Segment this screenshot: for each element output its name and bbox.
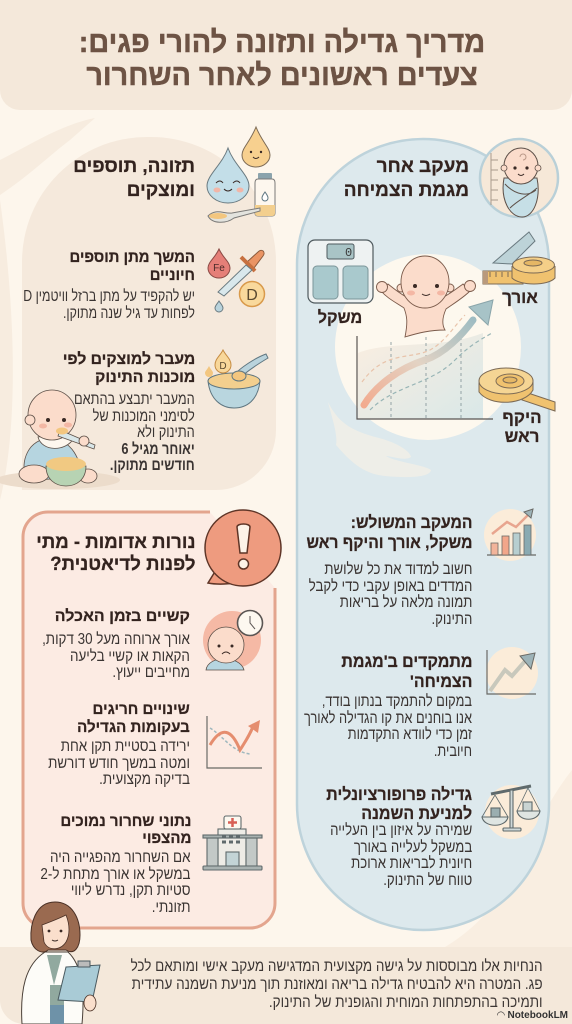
heading: low discharge data: [60, 813, 191, 847]
icon: head tape: [479, 368, 555, 411]
heading: nutrition: תזונה, תוספים: [73, 156, 195, 177]
text: growth curve: [304, 693, 472, 760]
icon: iron and vitamin D dropper: [208, 249, 264, 312]
text: triple tracking: תמונה מלאה על בריאות: [339, 594, 472, 611]
text: supplements: לפחות עד גיל שנה מתוקן.: [63, 305, 195, 322]
text: triple tracking: [308, 561, 472, 628]
icon: bar chart: [484, 509, 536, 561]
icon: measuring tape and ruler: [483, 232, 555, 284]
growth chart with baby: [335, 254, 521, 440]
heading: low discharge data: נתוני שחרור נמוכים: [60, 813, 191, 830]
text: low discharge data: במשקל או אורך מתחת ל-2: [41, 866, 191, 883]
text: proportional growth: חיונית לבריאות ארוכת: [351, 855, 472, 872]
text: low discharge data: סטיות תקן, נדרש ליווי: [71, 882, 191, 899]
icon: swaddled baby: [480, 139, 558, 217]
text: feeding difficulty: [42, 631, 190, 681]
heading: growth tracking: [344, 156, 469, 201]
heading: solids: מוכנות התינוק: [95, 369, 195, 386]
heading: triple tracking: המעקב המשולש:: [350, 513, 472, 532]
heading: supplements: חיוניים: [150, 266, 195, 284]
background hand top left: [0, 118, 95, 500]
text: triple tracking: חשוב למדוד את כל שלושת: [324, 561, 472, 578]
heading: low discharge data: מהצפוי: [142, 830, 191, 847]
heading: triple tracking: [306, 513, 472, 552]
header band: [0, 0, 572, 110]
icon: scale: 0: [345, 246, 352, 260]
text: solids: יאוחר מגיל 6: [122, 441, 195, 458]
icon: supplement drops and bottle: [207, 127, 275, 222]
text: proportional growth: [330, 822, 472, 889]
text: solids: [74, 391, 195, 474]
heading: growth curve: הצמיחה': [410, 672, 472, 691]
footer text: ותמיכה בהתפתחות המוחית והגופנית של התינוק.: [269, 994, 543, 1011]
text: abnormal changes: ירידה בסטיית תקן אחת: [61, 738, 190, 755]
heading: red flags: לפנות לדיאטנית?: [50, 554, 195, 575]
heading: feeding difficulty: קשיים בזמן האכלה: [55, 608, 190, 625]
text: growth curve: זמן כדי לוודא התקדמות: [348, 726, 472, 743]
text: triple tracking: התינוק.: [431, 611, 472, 628]
NotebookLM badge: ◠ NotebookLM: [497, 1010, 568, 1021]
text: triple tracking: המדדים באופן עקבי כדי לקבל: [308, 578, 472, 595]
title: מדריך גדילה ותזונה להורי פגים:: [79, 26, 485, 59]
text: solids: המעבר יתבצע בהתאם: [74, 391, 195, 408]
text: proportional growth: טווח של התינוק.: [383, 872, 472, 889]
text: feeding difficulty: הקאות או קשיי בליעה: [70, 648, 190, 665]
title: צעדים ראשונים לאחר השחרור: [86, 59, 478, 92]
text: feeding difficulty: מחייבים ייעוץ.: [112, 664, 190, 681]
text: growth curve: במקום להתמקד בנתון בודד,: [322, 693, 472, 710]
icon: bowl with spoon: [205, 350, 268, 408]
icon: iron and vitamin D dropper: D: [246, 287, 258, 304]
panel: red flags: [23, 512, 275, 928]
panel: growth tracking: [297, 139, 549, 930]
heading: proportional growth: למניעת השמנה: [361, 804, 472, 822]
footer band: [0, 947, 572, 1024]
text: growth curve: חיובית.: [434, 743, 472, 760]
icon: warning speech bubble: [205, 510, 281, 586]
text: abnormal changes: ומטה במשך חודש דורשת: [48, 755, 190, 772]
label: head circumference: [502, 408, 542, 446]
icon: growth curve: [486, 647, 538, 699]
heading: abnormal changes: שינויים חריגים: [93, 701, 190, 718]
label: head circumference: היקף: [502, 408, 542, 427]
heading: growth curve: [341, 652, 472, 691]
footer text: פג. המטרה היא להבטיח גדילה בריאה ומאוזנת תוך מניעת השמנה עתידית: [132, 976, 543, 993]
heading: red flags: נורות אדומות - מתי: [36, 532, 195, 553]
decorative hand in growth panel: [328, 402, 431, 477]
footer text: הנחיות אלו מבוססות על גישה מקצועית המדגישה מעקב אישי ומותאם לכל: [131, 958, 543, 975]
icon: upset baby with clock: [203, 610, 262, 670]
text: proportional growth: במשקל לעלייה באורך: [354, 839, 472, 856]
heading: supplements: המשך מתן תוספים: [69, 249, 195, 266]
text: growth curve: אנו בוחנים את קו הגדילה לאורך: [304, 710, 472, 727]
label: head circumference: ראש: [505, 427, 539, 446]
heading: growth tracking: מגמת הצמיחה: [344, 180, 469, 201]
heading: growth curve: מתמקדים ב'מגמת: [341, 652, 472, 671]
text: solids: חודשים מתוקן.: [110, 457, 195, 474]
heading: nutrition: [73, 156, 195, 201]
text: abnormal changes: [48, 738, 190, 788]
heading: proportional growth: [326, 785, 472, 822]
text: low discharge data: תזונתי.: [152, 899, 191, 916]
text: supplements: [23, 288, 195, 322]
icon: balance scales: [482, 785, 540, 839]
label: weight: משקל: [318, 308, 362, 327]
text: solids: לסימני המוכנות של: [93, 408, 195, 425]
heading: abnormal changes: [77, 701, 190, 736]
heading: abnormal changes: בעקומות הגדילה: [77, 719, 190, 736]
text: proportional growth: שמירה על איזון בין העלייה: [330, 822, 472, 839]
footer text: [131, 958, 543, 1011]
icon: scale: [308, 240, 373, 303]
text: low discharge data: אם השחרור מהפגייה היה: [50, 849, 191, 866]
heading: red flags: [36, 532, 195, 575]
icon: iron and vitamin D dropper: Fe: [213, 263, 225, 274]
heading: growth tracking: מעקב אחר: [377, 156, 469, 177]
heading: nutrition: ומוצקים: [127, 180, 195, 201]
panel: nutrition: [22, 137, 276, 490]
illustration: dietitian: [22, 902, 100, 1024]
heading: proportional growth: גדילה פרופורציונלית: [326, 785, 472, 804]
heading: triple tracking: משקל, אורך והיקף ראש: [306, 532, 472, 552]
icon: bowl with spoon: D: [219, 361, 227, 372]
icon: abnormal growth chart: [207, 716, 262, 768]
text: abnormal changes: בדיקה מקצועית.: [99, 771, 190, 788]
text: supplements: יש להקפיד על מתן ברזל וויטמין D: [23, 288, 195, 305]
text: solids: התינוק ולא: [137, 424, 195, 441]
icon: hospital: [203, 816, 262, 870]
baby figure: [376, 256, 476, 337]
title: [79, 26, 485, 92]
label: length: אורך: [502, 288, 538, 307]
text: low discharge data: [41, 849, 191, 916]
illustration: baby eating: [0, 390, 120, 489]
heading: solids: מעבר למוצקים לפי: [62, 351, 195, 368]
text: feeding difficulty: אורך ארוחה מעל 30 דקות,: [42, 631, 190, 648]
background hand bottom right: [445, 770, 572, 947]
heading: solids: [62, 351, 195, 386]
heading: supplements: [69, 249, 195, 284]
